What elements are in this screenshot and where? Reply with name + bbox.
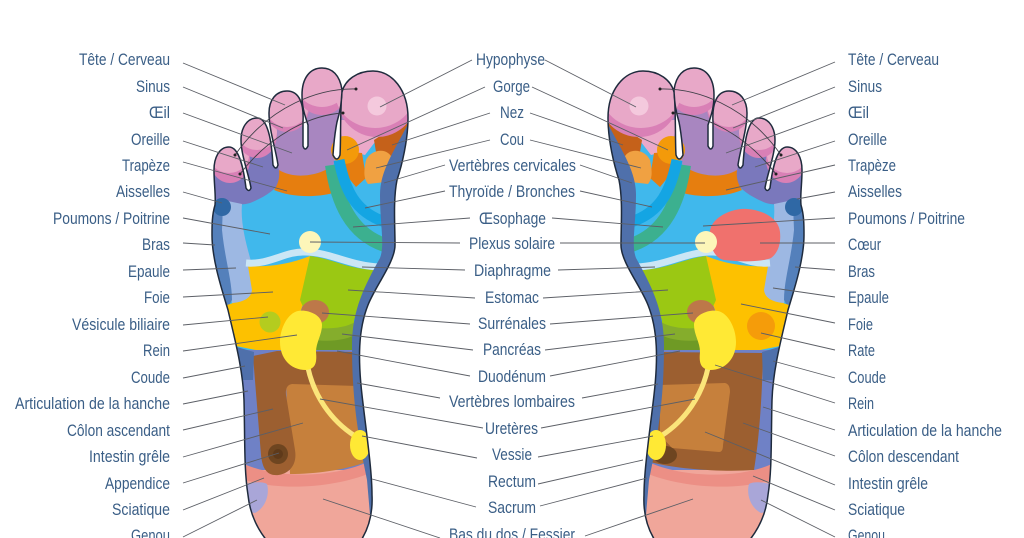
left labels: Coude bbox=[131, 369, 170, 387]
left foot: small toe pink bbox=[214, 148, 250, 183]
left labels: Foie bbox=[144, 289, 170, 307]
left labels: Rein bbox=[143, 342, 170, 360]
right foot: light orange zone bbox=[624, 151, 652, 184]
right foot: spleen bbox=[747, 312, 775, 340]
curved leaders with dots: right foot bbox=[658, 88, 782, 176]
centre labels: Uretères bbox=[485, 420, 538, 438]
right foot: heart zone bbox=[710, 209, 780, 261]
right foot: brown-orange zone bbox=[604, 115, 642, 158]
right foot: fourth toe pink bbox=[739, 112, 779, 158]
right foot: big toe pink bbox=[599, 56, 681, 137]
centre labels: Thyroïde / Bronches bbox=[449, 183, 575, 201]
left foot: blue band bbox=[339, 160, 385, 222]
right foot: under big toe pink bbox=[616, 120, 678, 155]
left foot: orange circle bbox=[331, 136, 359, 164]
right foot: toe base purple zone bbox=[671, 70, 754, 176]
right foot: light purple sciatic zone bbox=[748, 482, 776, 513]
right foot: salmon band bbox=[646, 461, 776, 487]
left foot: brown-orange zone bbox=[374, 123, 408, 156]
left foot: green stomach zone bbox=[300, 256, 374, 328]
left labels: Vésicule biliaire bbox=[72, 316, 170, 334]
right foot: kidney bbox=[694, 311, 736, 370]
right foot: outer blue arm zone bbox=[784, 205, 811, 311]
right foot: solar plexus bbox=[695, 231, 717, 253]
curved leaders with dots: left foot bbox=[234, 88, 358, 176]
right labels: Sinus bbox=[848, 78, 882, 96]
centre labels: Rectum bbox=[488, 473, 536, 491]
left foot: appendix circle bbox=[268, 444, 288, 464]
right labels: Côlon descendant bbox=[848, 448, 959, 466]
right foot: armpit circle bbox=[785, 198, 803, 216]
right foot: elbow blue band bbox=[762, 345, 786, 380]
left foot: heel bbox=[247, 470, 370, 538]
left foot: light purple sciatic zone bbox=[247, 482, 268, 513]
right labels: Aisselles bbox=[848, 183, 902, 201]
centre labels: Cou bbox=[500, 131, 524, 149]
right foot: ureter bbox=[661, 368, 708, 436]
right foot: light brown intestine bbox=[660, 383, 730, 452]
right foot: third toe pink bbox=[707, 83, 751, 132]
centre labels: Surrénales bbox=[478, 315, 546, 333]
left foot: gallbladder bbox=[260, 312, 280, 332]
left foot: orange shoulder band bbox=[274, 170, 331, 196]
right labels: Coude bbox=[848, 369, 886, 387]
right labels: Sciatique bbox=[848, 501, 905, 519]
right foot: small toe pink bbox=[766, 137, 807, 183]
left labels bbox=[15, 51, 170, 538]
left foot: light blue arm zone bbox=[220, 200, 252, 303]
centre labels: Duodénum bbox=[478, 368, 546, 386]
right foot: rectum circle bbox=[653, 446, 677, 464]
left foot: kidney bbox=[280, 311, 322, 370]
right labels: Trapèze bbox=[848, 157, 896, 175]
left foot: ureter bbox=[308, 368, 355, 436]
centre labels: Plexus solaire bbox=[469, 235, 555, 253]
right foot: diaphragm line bbox=[636, 252, 770, 267]
right foot: brown colon bbox=[650, 352, 763, 471]
left foot: duodenum green bbox=[316, 336, 352, 350]
left foot: light orange zone bbox=[364, 151, 392, 184]
right labels: Poumons / Poitrine bbox=[848, 210, 965, 228]
left foot: bladder bbox=[350, 430, 370, 460]
leader lines: centre column to left foot bbox=[310, 60, 490, 538]
left foot: gold liver zone bbox=[224, 256, 310, 356]
right labels: Tête / Cerveau bbox=[848, 51, 939, 69]
centre labels: Gorge bbox=[493, 78, 530, 96]
right labels: Foie bbox=[848, 316, 873, 334]
left foot: toe base purple zone bbox=[274, 108, 344, 176]
right labels: Epaule bbox=[848, 289, 889, 307]
centre labels: Hypophyse bbox=[476, 51, 545, 69]
left foot: solar sky zone bbox=[216, 142, 382, 350]
right foot: orange zone under big toe bbox=[650, 152, 672, 187]
centre labels: Sacrum bbox=[488, 499, 536, 517]
centre labels: Vertèbres cervicales bbox=[449, 157, 576, 175]
right labels bbox=[848, 51, 1002, 538]
left foot: outline bbox=[212, 68, 408, 538]
right labels: Intestin grêle bbox=[848, 475, 928, 493]
right labels: Rate bbox=[848, 342, 875, 360]
centre labels: Estomac bbox=[485, 289, 539, 307]
centre labels: Pancréas bbox=[483, 341, 541, 359]
right foot: blue band bbox=[631, 160, 677, 222]
right foot: lower-foot base bbox=[650, 350, 780, 470]
left foot: third toe pink bbox=[270, 92, 309, 132]
left foot: light brown intestine bbox=[286, 384, 366, 474]
left labels: Intestin grêle bbox=[89, 448, 170, 466]
right labels: Oreille bbox=[848, 131, 887, 149]
left labels: Trapèze bbox=[122, 157, 170, 175]
left foot: outer blue band bbox=[352, 126, 407, 514]
left labels: Côlon ascendant bbox=[67, 422, 170, 440]
right foot: orange circle bbox=[657, 136, 685, 164]
left foot: lower-foot base bbox=[236, 350, 366, 470]
left labels: Œil bbox=[149, 104, 170, 122]
left labels: Articulation de la hanche bbox=[15, 395, 170, 413]
right foot: duodenum green bbox=[661, 335, 702, 356]
left foot: salmon band bbox=[246, 464, 366, 486]
right labels: Cœur bbox=[848, 236, 881, 254]
left labels: Tête / Cerveau bbox=[79, 51, 170, 69]
leader lines: left column to left foot bbox=[183, 63, 303, 537]
right foot: green stomach zone bbox=[638, 256, 716, 345]
left foot: brown colon bbox=[253, 351, 358, 475]
left labels: Bras bbox=[142, 236, 170, 254]
left foot: diaphragm line bbox=[246, 252, 380, 267]
left foot bbox=[211, 67, 409, 538]
leader lines: centre column to right foot bbox=[530, 60, 705, 536]
right foot: outer blue band bbox=[596, 120, 664, 515]
left foot: toe base violet zone bbox=[214, 151, 280, 204]
left labels: Aisselles bbox=[116, 183, 170, 201]
centre labels bbox=[449, 51, 576, 538]
centre labels: Vertèbres lombaires bbox=[449, 393, 575, 411]
left labels: Sciatique bbox=[112, 501, 170, 519]
right labels: Bras bbox=[848, 263, 875, 281]
left labels: Epaule bbox=[128, 263, 170, 281]
right foot: second toe pink bbox=[668, 59, 720, 115]
right foot: heel bbox=[636, 465, 776, 538]
left foot: elbow blue band bbox=[237, 347, 254, 380]
left foot: teal band bbox=[332, 165, 388, 246]
left labels: Oreille bbox=[131, 131, 170, 149]
centre labels: Œsophage bbox=[479, 210, 546, 228]
left foot: solar plexus bbox=[299, 231, 321, 253]
right labels: Rein bbox=[848, 395, 874, 413]
left foot: orange zone under big toe bbox=[346, 152, 366, 187]
right foot: pancreas green bbox=[661, 322, 698, 345]
centre labels: Nez bbox=[500, 104, 524, 122]
right foot: toe base violet zone bbox=[734, 130, 811, 205]
right foot: gold liver zone bbox=[706, 256, 792, 356]
left foot: armpit circle bbox=[213, 198, 231, 216]
right labels: Œil bbox=[848, 104, 869, 122]
right foot: solar sky zone bbox=[601, 60, 811, 360]
left foot: pancreas green bbox=[318, 322, 354, 341]
leader lines: right column to right foot bbox=[703, 62, 835, 537]
left labels: Sinus bbox=[136, 78, 170, 96]
right labels: Articulation de la hanche bbox=[848, 422, 1002, 440]
centre labels: Vessie bbox=[492, 446, 532, 464]
left foot: under big toe pink bbox=[341, 120, 379, 155]
right foot: teal band bbox=[628, 165, 684, 246]
left foot: outer blue arm zone bbox=[212, 212, 232, 305]
left foot: big toe pink bbox=[337, 72, 408, 137]
left foot: adrenal bbox=[301, 300, 329, 324]
right foot: adrenal bbox=[687, 300, 715, 324]
right foot: orange shoulder band bbox=[683, 167, 742, 196]
left foot: fourth toe pink bbox=[242, 118, 277, 158]
right foot: outline bbox=[608, 68, 804, 538]
centre labels: Diaphragme bbox=[474, 262, 551, 280]
right foot: light blue arm zone bbox=[764, 200, 796, 303]
left foot: second toe pink bbox=[298, 68, 339, 115]
right foot bbox=[596, 56, 811, 538]
right foot: bladder bbox=[646, 430, 666, 460]
left labels: Appendice bbox=[105, 475, 170, 493]
left labels: Poumons / Poitrine bbox=[53, 210, 170, 228]
